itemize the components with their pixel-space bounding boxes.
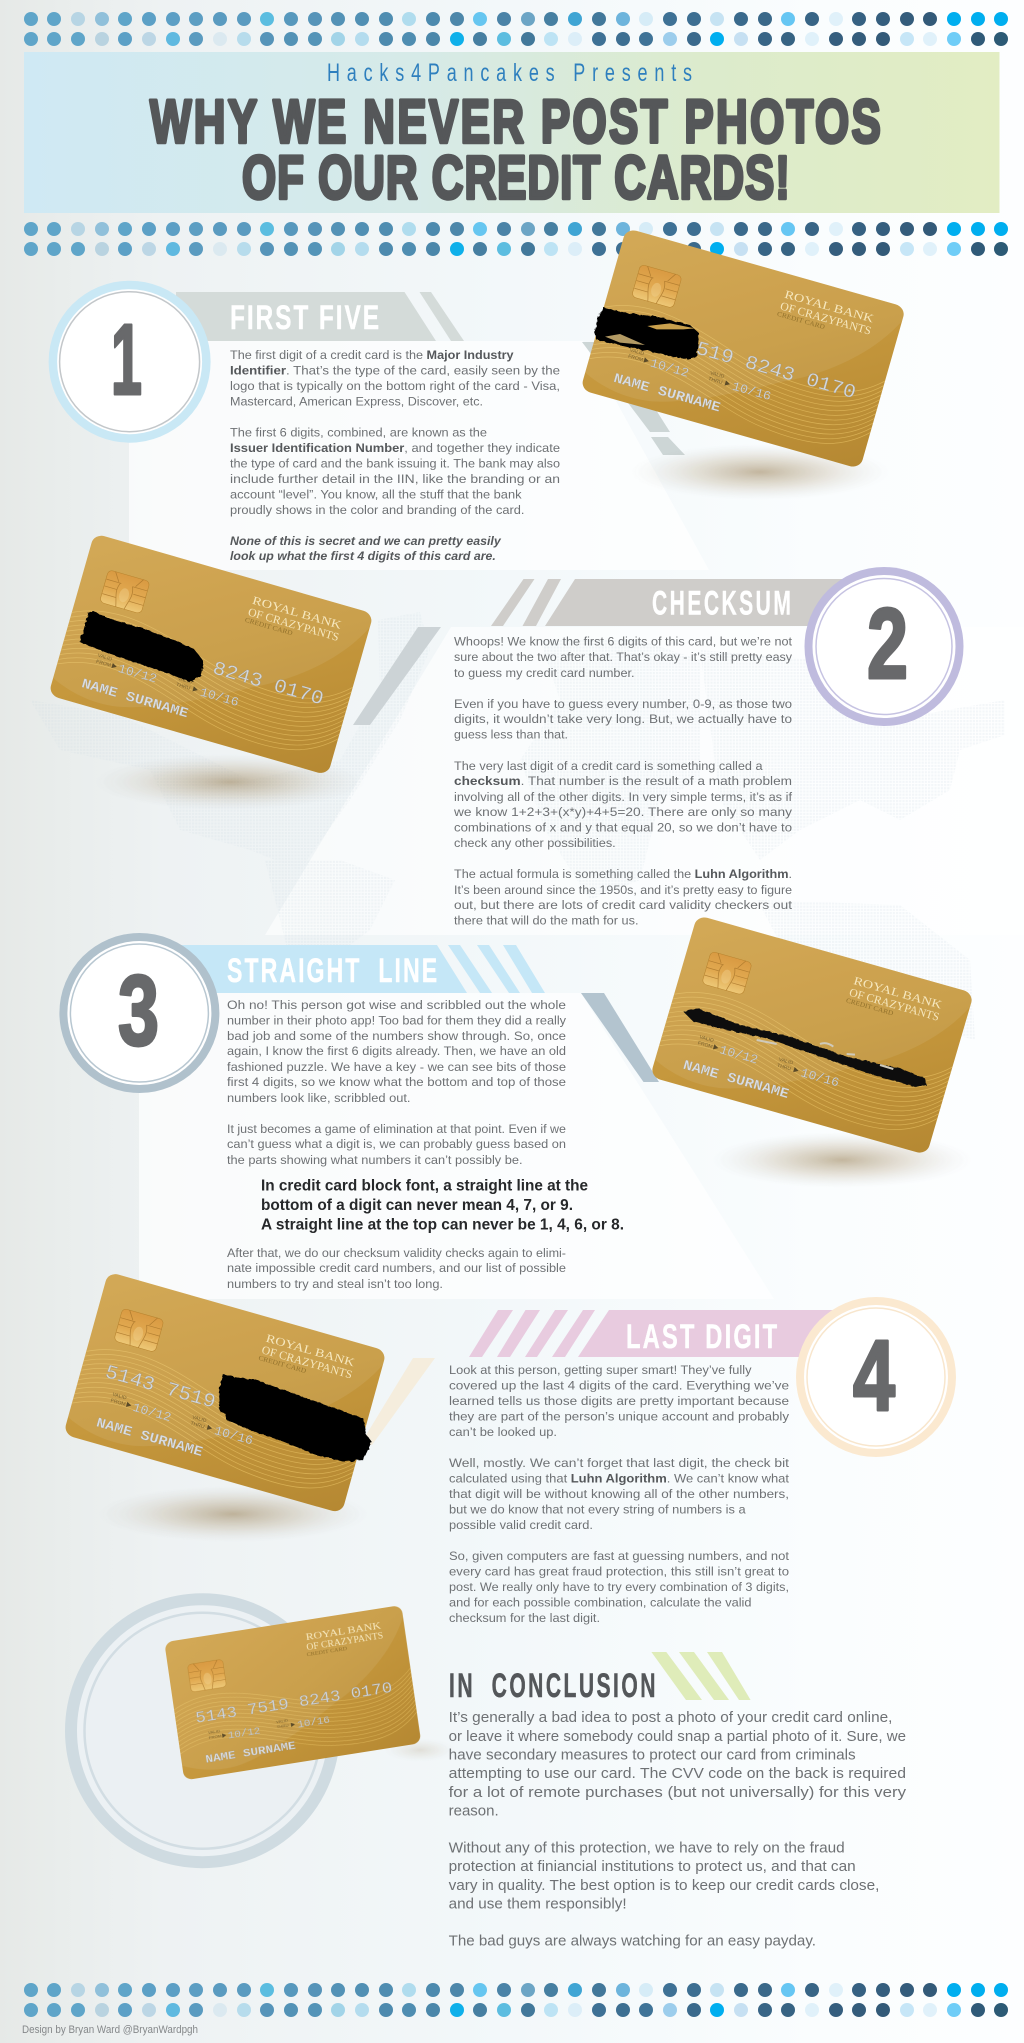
section 1: text (230, 348, 560, 563)
title: OF OUR CREDIT CARDS! (242, 145, 790, 212)
section 4: text: and for each possible combination, calculate the valid (449, 1596, 752, 1610)
section 1: number circle: 1 (111, 304, 142, 416)
card shadows (95, 444, 972, 1762)
section 3: text: nate impossible credit card numbers, and our list of possible (227, 1261, 566, 1275)
dotted world map (30, 612, 1005, 1040)
conclusion text: vary in quality. The best option is to keep our credit cards close, (449, 1877, 879, 1894)
credit card two: NAME SURNAME (80, 677, 190, 722)
section 1: text: include further detail in the IIN, like the branding or an (230, 472, 560, 486)
section 4: text: can’t be looked up. (449, 1425, 557, 1439)
credit card one: 5143 7519 8243 0170 (620, 318, 858, 405)
conclusion text: and use them responsibly! (449, 1896, 627, 1912)
section 1: text: Issuer Identification Number , and together they indicate (230, 441, 560, 455)
credit card five: VALID (208, 1729, 220, 1735)
section 4: text: every card has great fraud protection, this still isn’t great to (449, 1564, 789, 1578)
stripe behind card two (353, 627, 441, 725)
credit card three: 10/12 (718, 1043, 760, 1067)
credit card five: THRU (276, 1723, 289, 1730)
section 3: text: number in their photo app! Too bad for them they did a really (227, 1014, 567, 1028)
heading: in conclusion: IN CONCLUSION (449, 1666, 655, 1704)
bottom dot strip (24, 1983, 1008, 2017)
credit card four: ROYAL BANK (264, 1331, 357, 1369)
section 1: text: The first digit of a credit card is the Major Industry (230, 348, 514, 362)
title (150, 89, 881, 212)
section 2: text (453, 634, 793, 928)
credit card two: 10/16 (198, 685, 240, 710)
section 4: number circle (796, 1297, 956, 1457)
heading: first five: FIRST FIVE (230, 299, 379, 337)
section 2: text: check any other possibilities. (454, 836, 616, 850)
credit card four: FROM (110, 1398, 126, 1408)
section 4: text (449, 1363, 790, 1625)
section 3: callout: A straight line at the top can never be 1, 4, 6, or 8. (261, 1216, 624, 1234)
credit card one: THRU (707, 376, 723, 386)
credit card one: VALID (629, 348, 645, 357)
section 2: text: Even if you have to guess every number, 0-9, as those two (454, 697, 792, 711)
credit card five: NAME SURNAME (205, 1739, 297, 1767)
section 4: number circle: 4 (853, 1320, 895, 1432)
section 2: number circle: 2 (867, 588, 908, 700)
section 2: text: there that will do the math for us. (454, 914, 638, 928)
conclusion text (449, 1709, 906, 1950)
credit card five: VALID (276, 1718, 288, 1724)
credit card one: NAME SURNAME (612, 371, 722, 416)
section 3: text: first 4 digits, so we know what the bottom and top of those (227, 1075, 566, 1089)
credit card one: FROM (627, 354, 644, 363)
credit card four: 5143 7519 8243 0170 (102, 1362, 339, 1449)
credit card five: 5143 7519 8243 0170 (194, 1679, 394, 1728)
section 3: text: numbers look like, scribbled out. (227, 1091, 410, 1105)
section 3: number circle (59, 933, 219, 1093)
credit card five: OF CRAZYPANTS (306, 1631, 384, 1653)
section 1: text: account “level”. You know, all the stuff that the bank (230, 488, 522, 502)
footer credit: Design by Bryan Ward @BryanWardpgh (22, 2024, 198, 2036)
credit card three: CREDIT CARD (845, 998, 894, 1017)
section 3: text: After that, we do our checksum validity checks again to elimi- (227, 1246, 566, 1260)
credit card two: ROYAL BANK (251, 593, 343, 632)
credit card four: VALID (191, 1415, 207, 1424)
section 2: text: combinations of x and y that equal 20, so we don’t have to (454, 820, 792, 834)
section 3: text: It just becomes a game of elimination at that point. Even if we (227, 1122, 566, 1136)
credit card four: 10/12 (131, 1400, 173, 1425)
conclusion text: for a lot of remote purchases (but not universally) for this very (449, 1784, 906, 1801)
credit card three: 10/16 (799, 1066, 841, 1090)
section 1: text: Mastercard, American Express, Discover, etc. (230, 394, 483, 408)
credit card two: OF CRAZYPANTS (247, 605, 341, 644)
credit card three: OF CRAZYPANTS (848, 985, 941, 1024)
presenter line: Hacks4Pancakes Presents (327, 58, 692, 87)
stripe behind card four (360, 1358, 435, 1445)
credit card two: VALID (177, 676, 193, 686)
conclusion stripes (651, 1652, 751, 1700)
credit card four: VALID (112, 1392, 128, 1402)
section 4: header (469, 1310, 850, 1357)
credit card five: CREDIT CARD (306, 1646, 347, 1658)
section 3: callout: bottom of a digit can never mean 4, 7, or 9. (261, 1197, 573, 1214)
section 3: text: numbers to try and steal isn’t too long. (227, 1277, 443, 1291)
section 4: text: they are part of the person’s unique account and probably (449, 1410, 790, 1424)
credit card one: ROYAL BANK (783, 287, 876, 325)
section 1: text: None of this is secret and we can pretty easily (230, 534, 502, 548)
section 2: text: out, but there are lots of credit card validity checkers out (454, 898, 793, 912)
credit card five: 10/16 (297, 1715, 331, 1731)
section 2: text: The very last digit of a credit card is something called a (454, 759, 763, 773)
section 3: text: again, I know the first 6 digits already. Then, we have an old (227, 1044, 566, 1058)
credit card five: FROM (209, 1733, 222, 1740)
conclusion text: Without any of this protection, we have to rely on the fraud (449, 1840, 845, 1856)
conclusion circle (71, 1599, 334, 1862)
credit card two: VALID (97, 653, 113, 663)
section 3: text: Oh no! This person got wise and scribbled out the whole (227, 998, 566, 1012)
credit card five: 10/12 (227, 1726, 261, 1742)
credit card one: 10/16 (730, 379, 773, 404)
scribble on card two (80, 612, 204, 682)
credit card two: THRU (175, 682, 191, 692)
section 4: text: post. We really only have to try every combination of 3 digits, (449, 1580, 789, 1594)
section 1: header (176, 292, 464, 341)
credit card three: VALID (699, 1034, 715, 1044)
section 4: text: possible valid credit card. (449, 1518, 593, 1532)
credit card four: 10/16 (213, 1424, 254, 1448)
credit card three (645, 914, 979, 1156)
credit card two: CREDIT CARD (244, 616, 294, 637)
conclusion text: have secondary measures to protect our card from criminals (449, 1746, 856, 1764)
credit card three: FROM (697, 1040, 713, 1050)
conclusion text: or leave it where somebody could snap a partial photo of it. Sure, we (449, 1728, 906, 1745)
section 4: text: covered up the last 4 digits of the card. Everything we’ve (449, 1378, 789, 1392)
credit card five: ROYAL BANK (305, 1621, 383, 1643)
section 3: callout: In credit card block font, a straight line at the (261, 1178, 588, 1194)
title: WHY WE NEVER POST PHOTOS (150, 89, 881, 156)
credit card three: THRU (776, 1063, 792, 1072)
conclusion text: attempting to use our card. The CVV code on the back is required (449, 1765, 906, 1782)
second dot strip (24, 222, 1008, 256)
section 1: text: Identifier . That’s the type of the card, easily seen by the (230, 364, 560, 378)
stripe behind card three (581, 993, 659, 1082)
credit card four: THRU (190, 1421, 206, 1430)
conclusion text: reason. (449, 1802, 499, 1820)
section 3: text: can’t guess what a digit is, we can probably guess based on (227, 1137, 566, 1151)
title banner (24, 52, 1000, 213)
section 2: text: involving all of the other digits. In very simple terms, it’s as if (454, 790, 793, 804)
section 1: number circle (49, 281, 211, 443)
credit card one: OF CRAZYPANTS (779, 299, 873, 338)
heading: straight line: STRAIGHT LINE (227, 953, 437, 990)
section 2: text: digits, it wouldn’t take very long. But, we actually have to (454, 712, 792, 726)
credit card one: VALID (709, 370, 725, 380)
section 3: callout (261, 1178, 624, 1234)
section 4: text: checksum for the last digit. (449, 1611, 600, 1625)
section 3: text: fashioned puzzle. We have a key - we can see bits of those (227, 1060, 566, 1074)
stripe behind card one (582, 342, 685, 455)
section 4: text: So, given computers are fast at guessing numbers, and not (449, 1549, 790, 1563)
section 4: text: but we do know that not every string of numbers is a (449, 1502, 746, 1516)
scribble on card one (594, 307, 699, 359)
section 2: text: Whoops! We know the first 6 digits of this card, but we’re not (454, 634, 793, 648)
section 4: text: Well, mostly. We can’t forget that last digit, the check bit (449, 1456, 790, 1470)
section 2: text: to guess my credit card number. (454, 666, 635, 680)
section 1: text: The first 6 digits, combined, are known as the (230, 426, 487, 440)
section 2: text: It’s been around since the 1950s, and it’s pretty easy to figure (454, 883, 792, 897)
section 1: text: logo that is typically on the bottom right of the card - Visa, (230, 379, 560, 393)
credit card one: 10/12 (648, 356, 691, 381)
scribble on card three (683, 1008, 927, 1087)
section 3: text: bad job and some of the numbers show through. So, once (227, 1029, 566, 1043)
section 4: text: Look at this person, getting super smart! They’ve fully (449, 1363, 752, 1377)
section 3: text (227, 998, 567, 1291)
conclusion text: The bad guys are always watching for an easy payday. (449, 1932, 816, 1950)
credit card five (160, 1604, 425, 1781)
credit card three: NAME SURNAME (681, 1058, 791, 1103)
section 4: text: that digit will be without knowing all of the other numbers, (449, 1487, 789, 1501)
panel: checksum background (265, 627, 1024, 935)
heading: checksum: CHECKSUM (652, 583, 791, 622)
section 1: text: look up what the first 4 digits of this card are. (230, 549, 496, 563)
section 2: header (491, 579, 855, 626)
section 2: text: we know 1+2+3+(x*y)+4+5=20. There are only so many (453, 805, 793, 819)
heading: last digit: LAST DIGIT (626, 1318, 777, 1356)
credit card three: ROYAL BANK (852, 974, 944, 1012)
section 1: text: the type of card and the bank issuing it. The bank may also (230, 456, 560, 470)
section 2: number circle (804, 567, 964, 726)
credit card four: NAME SURNAME (94, 1416, 205, 1461)
section 2: text: The actual formula is something called the Luhn Algorithm. (454, 867, 792, 881)
section 4: text: calculated using that Luhn Algorithm . We can’t know what (449, 1472, 790, 1486)
top dot strip (24, 12, 1008, 46)
credit card two: 10/12 (116, 662, 158, 686)
credit card one: CREDIT CARD (776, 310, 826, 331)
panel: straight line background (139, 993, 774, 1299)
section 2: text: guess less than that. (454, 728, 568, 742)
scribble on card four (218, 1375, 372, 1462)
credit card three: VALID (778, 1057, 794, 1066)
credit card one (576, 227, 911, 470)
credit card four (59, 1270, 391, 1515)
section 2: text: sure about the two after that. That’s okay - it’s still pretty easy (454, 650, 793, 664)
section 4: text: learned tells us those digits are pretty important because (449, 1394, 789, 1408)
credit card four: CREDIT CARD (258, 1354, 307, 1375)
section 3: header (176, 945, 545, 993)
section 3: number circle: 3 (118, 955, 159, 1067)
credit card four: OF CRAZYPANTS (260, 1343, 354, 1381)
panel: first five background (129, 341, 709, 570)
credit card two: FROM (95, 659, 112, 669)
section 1: text: proudly shows in the color and branding of the card. (230, 503, 524, 517)
credit card two: 5143 7519 8243 0170 (88, 623, 326, 711)
section 3: text: the parts showing what numbers it can’t possibly be. (227, 1153, 522, 1167)
conclusion text: protection at finiancial institutions to protect us, and that can (449, 1858, 856, 1875)
credit card two (44, 532, 378, 777)
section 2: text: checksum . That number is the result of a math problem (454, 774, 792, 788)
conclusion text: It’s generally a bad idea to post a photo of your credit card online, (449, 1709, 892, 1726)
